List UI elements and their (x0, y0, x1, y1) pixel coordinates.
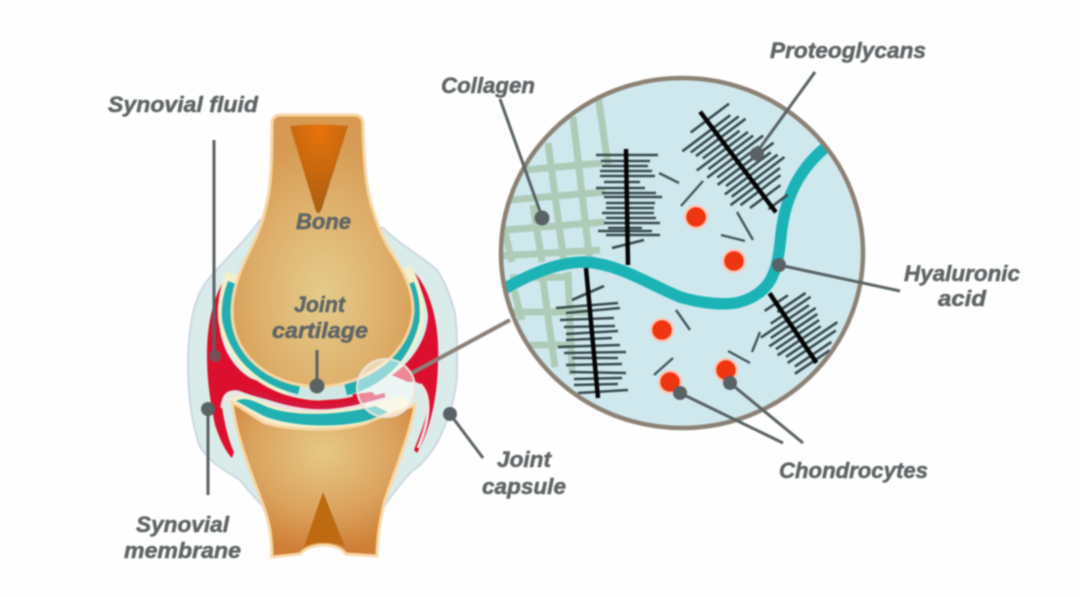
magnifier lens (357, 359, 415, 417)
lower pale gap (235, 393, 395, 420)
synovial membrane red right (392, 270, 438, 453)
bottom wedge (304, 492, 345, 547)
joint diagram (188, 115, 510, 557)
label: proteoglycans: Proteoglycans (770, 38, 926, 63)
chondrocyte cells (651, 206, 745, 393)
label: synovial membrane: membrane (124, 538, 241, 563)
label: synovial fluid: Synovial fluid (108, 92, 259, 117)
proteoglycan lower right (760, 291, 839, 376)
label: hyaluronic acid: Hyaluronic (904, 261, 1020, 286)
thin red line (250, 390, 385, 407)
magnified detail circle (500, 78, 863, 428)
label: joint capsule (443, 407, 566, 499)
lower cartilage (228, 395, 415, 430)
upper cartilage band (230, 272, 411, 388)
label: joint capsule: Joint (497, 447, 553, 472)
label: chondrocytes (673, 376, 928, 483)
proteoglycan upper right (681, 102, 789, 214)
bone label: Bone (296, 209, 351, 234)
hyaluronic acid strand (504, 144, 830, 304)
proteoglycan upper left (596, 149, 662, 265)
lens connector (412, 320, 510, 373)
circle fill (501, 78, 863, 428)
top bone (232, 115, 413, 387)
leader: joint cartilage (310, 350, 324, 394)
joint diagram: cartilage (272, 318, 368, 343)
label: synovial membrane: Synovial (136, 512, 230, 537)
label: synovial fluid (108, 92, 259, 362)
synovial hook highlights (222, 384, 428, 448)
collagen mesh (500, 95, 608, 375)
label: collagen (441, 73, 550, 226)
label: synovial membrane (124, 402, 241, 563)
upper cartilage teal (230, 284, 411, 387)
label: chondrocytes: Chondrocytes (779, 458, 928, 483)
label: hyaluronic acid (772, 258, 1020, 311)
synovial membrane red left (207, 272, 378, 458)
label: collagen: Collagen (441, 73, 535, 98)
short fragments (654, 173, 760, 375)
bottom bone (232, 402, 415, 557)
label: hyaluronic acid: acid (938, 286, 987, 311)
proteoglycan lower left (556, 268, 628, 398)
label: proteoglycans (750, 38, 926, 161)
joint cartilage label: Joint (294, 292, 347, 317)
label: joint capsule: capsule (482, 474, 566, 499)
circle outline (501, 78, 863, 428)
top wedge (290, 124, 348, 213)
joint capsule (188, 220, 457, 505)
